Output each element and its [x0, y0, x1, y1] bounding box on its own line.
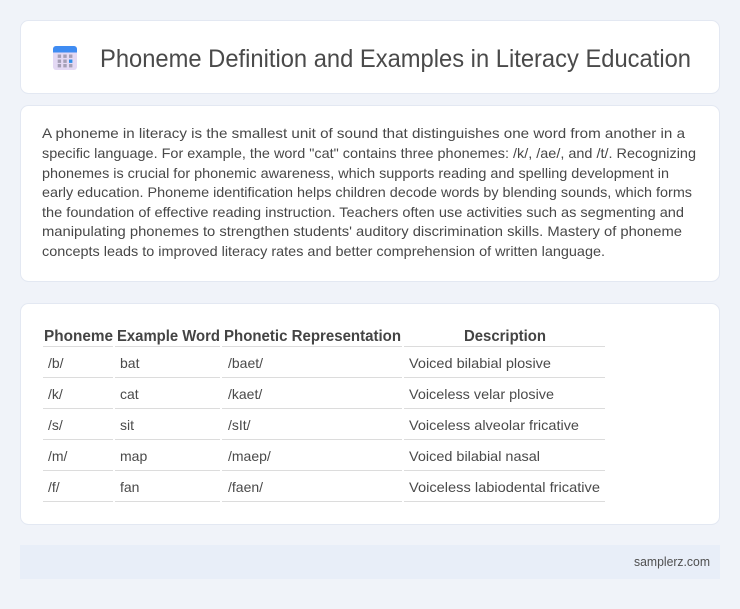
table row: f: fan	[120, 479, 139, 495]
text block: definition: manipulating phonemes to strengthen students' auditory discrimination skills. Mastery of phoneme	[42, 223, 682, 239]
table row: f: /faen/	[228, 479, 263, 495]
table header row: Example Word	[117, 328, 220, 345]
table row: m: Voiced bilabial nasal	[409, 448, 540, 464]
text block: definition: phonemes is crucial for phonemic awareness, which supports reading and spelling development in	[42, 165, 669, 181]
table row: b: /b/	[48, 355, 64, 371]
table row: k: Voiceless velar plosive	[409, 386, 554, 402]
table header row: Description	[464, 328, 546, 345]
footer text: samplerz.com	[634, 555, 710, 569]
title: Phoneme Definition and Examples in Literacy Education	[100, 45, 691, 73]
table row: k	[48, 386, 554, 402]
table row: m: map	[120, 448, 147, 464]
table row: f: Voiceless labiodental fricative	[409, 479, 600, 495]
table row: m: /maep/	[228, 448, 271, 464]
table row: s	[48, 417, 579, 433]
table row: s: sit	[120, 417, 134, 433]
icon: calendar grid	[53, 46, 77, 70]
table row: s: /sIt/	[228, 417, 251, 433]
table header row: Phonetic Representation	[224, 328, 401, 345]
table row: m	[48, 448, 540, 464]
text block: definition: concepts leads to improved literacy rates and better comprehension of written language.	[42, 243, 605, 259]
table row: m: /m/	[48, 448, 68, 464]
table header row	[44, 328, 546, 345]
table header row: Phoneme	[44, 328, 113, 345]
table row: k: /kaet/	[228, 386, 262, 402]
text block: definition: the foundation of effective reading instruction. Teachers often use activities such as segmenting and	[42, 204, 684, 220]
text block: definition: specific language. For example, the word "cat" contains three phonemes: /k/, /ae/, and /t/. Recognizing	[42, 145, 696, 161]
panel: header	[20, 20, 720, 94]
table row: f	[48, 479, 600, 495]
table rules	[43, 346, 605, 502]
panel: phoneme table	[20, 304, 720, 524]
footer bar	[20, 545, 720, 579]
table row: b: bat	[120, 355, 140, 371]
panel: definition paragraph	[20, 106, 720, 282]
text block: definition	[42, 125, 696, 259]
table row: b	[48, 355, 551, 371]
text block: definition: early education. Phoneme identification helps children decode words by blending sounds, which forms	[42, 184, 692, 200]
table row: s: /s/	[48, 417, 63, 433]
table row: s: Voiceless alveolar fricative	[409, 417, 579, 433]
text block: definition: A phoneme in literacy is the smallest unit of sound that distinguishes one word from another in a	[42, 125, 685, 141]
table row: k: /k/	[48, 386, 63, 402]
table row: f: /f/	[48, 479, 60, 495]
table row: k: cat	[120, 386, 139, 402]
table row: b: Voiced bilabial plosive	[409, 355, 551, 371]
table row: b: /baet/	[228, 355, 263, 371]
